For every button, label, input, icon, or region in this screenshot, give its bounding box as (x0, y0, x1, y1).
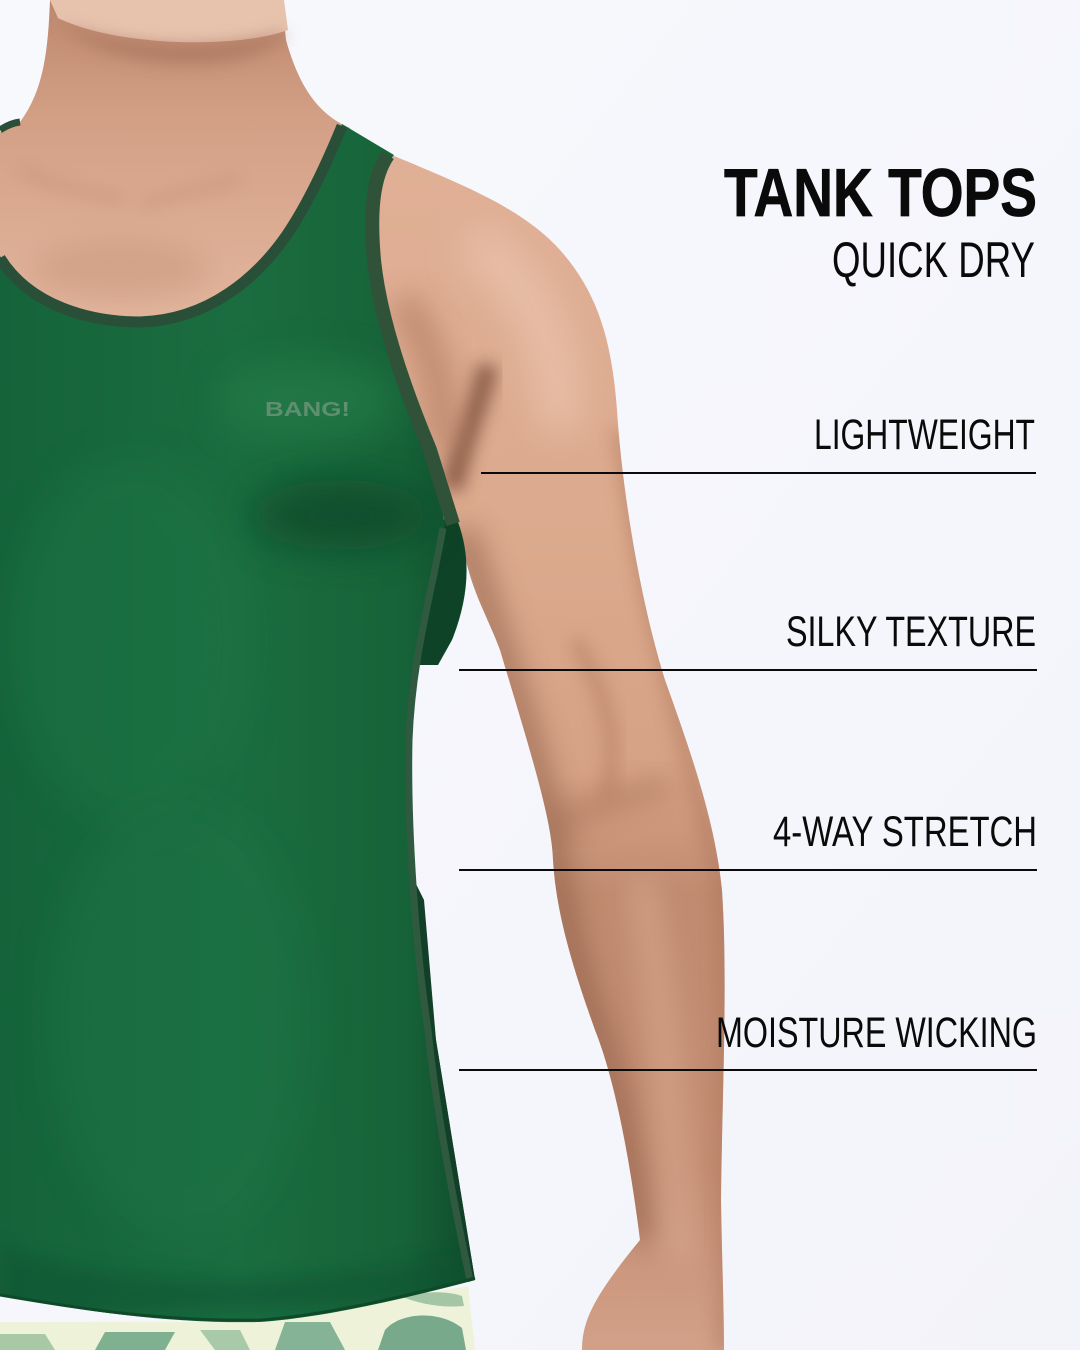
outer edge shade (620, 430, 724, 1350)
neck and chest (0, 0, 350, 345)
armpit shadow (452, 365, 488, 490)
biceps highlight (470, 240, 560, 430)
model photo illustration (0, 0, 725, 1350)
elbow creases (555, 785, 670, 825)
arm (360, 150, 725, 1350)
lower side panel (414, 880, 475, 1282)
collar and arm binding (0, 126, 342, 322)
back panel of tank (408, 518, 467, 665)
patterned shorts (0, 1286, 475, 1350)
logo: BANG! (265, 399, 350, 421)
forearm highlight (640, 880, 680, 1260)
side seam piping (409, 528, 470, 1280)
inner arm shadow (462, 530, 642, 1240)
green tank top (0, 122, 475, 1322)
